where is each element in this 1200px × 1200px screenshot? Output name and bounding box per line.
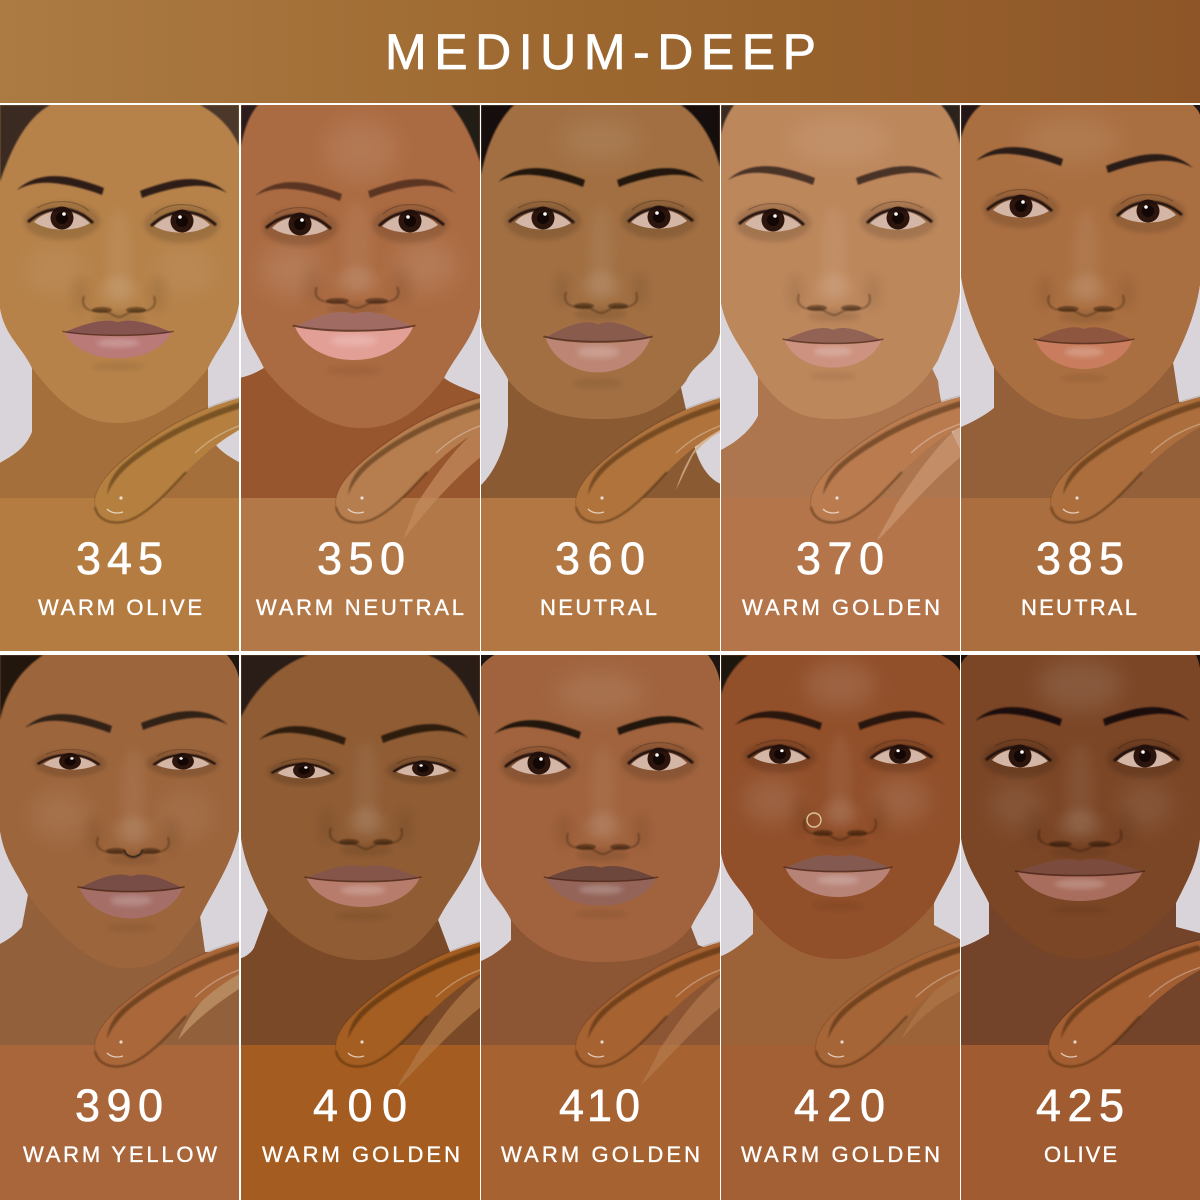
panel: shade 360	[479, 100, 733, 651]
shade name 390: WARM YELLOW	[23, 1142, 217, 1167]
foundation swatch 410	[576, 938, 733, 1085]
portrait 390	[0, 650, 242, 1055]
number 370: 370	[796, 533, 884, 584]
panel: shade 390	[0, 650, 252, 1200]
panel: shade 420	[719, 650, 973, 1200]
icon: septum ring	[124, 850, 143, 857]
label block 370	[721, 498, 960, 651]
label block 345	[0, 498, 239, 651]
label block 360	[481, 498, 720, 651]
label block 420	[721, 1045, 960, 1200]
shade name 385: NEUTRAL	[1021, 595, 1137, 620]
foundation swatch 390	[95, 938, 252, 1066]
label block 400	[241, 1045, 480, 1200]
label block 385	[961, 498, 1200, 651]
portrait 410	[479, 650, 723, 1055]
number 425: 425	[1036, 1080, 1124, 1131]
portrait 425	[959, 650, 1200, 1055]
number 390: 390	[75, 1080, 163, 1131]
number 410: 410	[559, 1080, 640, 1131]
label block 350	[241, 498, 480, 651]
shade name 400: WARM GOLDEN	[262, 1142, 460, 1167]
shade name 425: OLIVE	[1044, 1142, 1117, 1167]
number 350: 350	[317, 533, 405, 584]
shade name 410: WARM GOLDEN	[501, 1142, 700, 1167]
panel: shade 345	[0, 100, 252, 651]
portrait 420	[719, 650, 963, 1055]
foundation swatch 400	[336, 938, 493, 1087]
portrait 345	[0, 100, 242, 505]
header band	[0, 0, 1200, 103]
foundation swatch 420	[816, 938, 973, 1066]
foundation swatch 350	[336, 394, 493, 540]
panel: shade 385	[959, 100, 1200, 651]
foundation swatch 360	[576, 394, 733, 522]
panel: shade 400	[239, 650, 493, 1200]
number 400: 400	[313, 1080, 407, 1131]
icon: nose ring	[807, 813, 821, 827]
portrait 400	[239, 650, 483, 1055]
shade name 345: WARM OLIVE	[38, 595, 202, 620]
label block 390	[0, 1045, 239, 1200]
portrait 350	[239, 100, 483, 505]
number 360: 360	[555, 533, 645, 584]
foundation swatch 385	[1051, 394, 1200, 522]
panel: shade 370	[719, 100, 968, 651]
foundation swatch 345	[95, 394, 252, 522]
portrait 385	[959, 100, 1200, 505]
panel: shade 410	[479, 650, 733, 1200]
foundation swatch 425	[1049, 938, 1200, 1066]
shade name 360: NEUTRAL	[540, 595, 657, 620]
number 345: 345	[76, 533, 163, 584]
shade name 420: WARM GOLDEN	[741, 1142, 940, 1167]
portrait 360	[479, 100, 723, 505]
portrait 370	[719, 100, 963, 505]
number 385: 385	[1036, 533, 1124, 584]
label block 410	[481, 1045, 720, 1200]
panel: shade 350	[239, 100, 493, 651]
title: MEDIUM-DEEP	[385, 24, 816, 80]
label block 425	[961, 1045, 1200, 1200]
panel: shade 425	[959, 650, 1200, 1200]
shade name 350: WARM NEUTRAL	[256, 595, 464, 620]
number 420: 420	[794, 1080, 885, 1131]
foundation swatch 370	[811, 394, 968, 541]
shade name 370: WARM GOLDEN	[742, 595, 940, 620]
